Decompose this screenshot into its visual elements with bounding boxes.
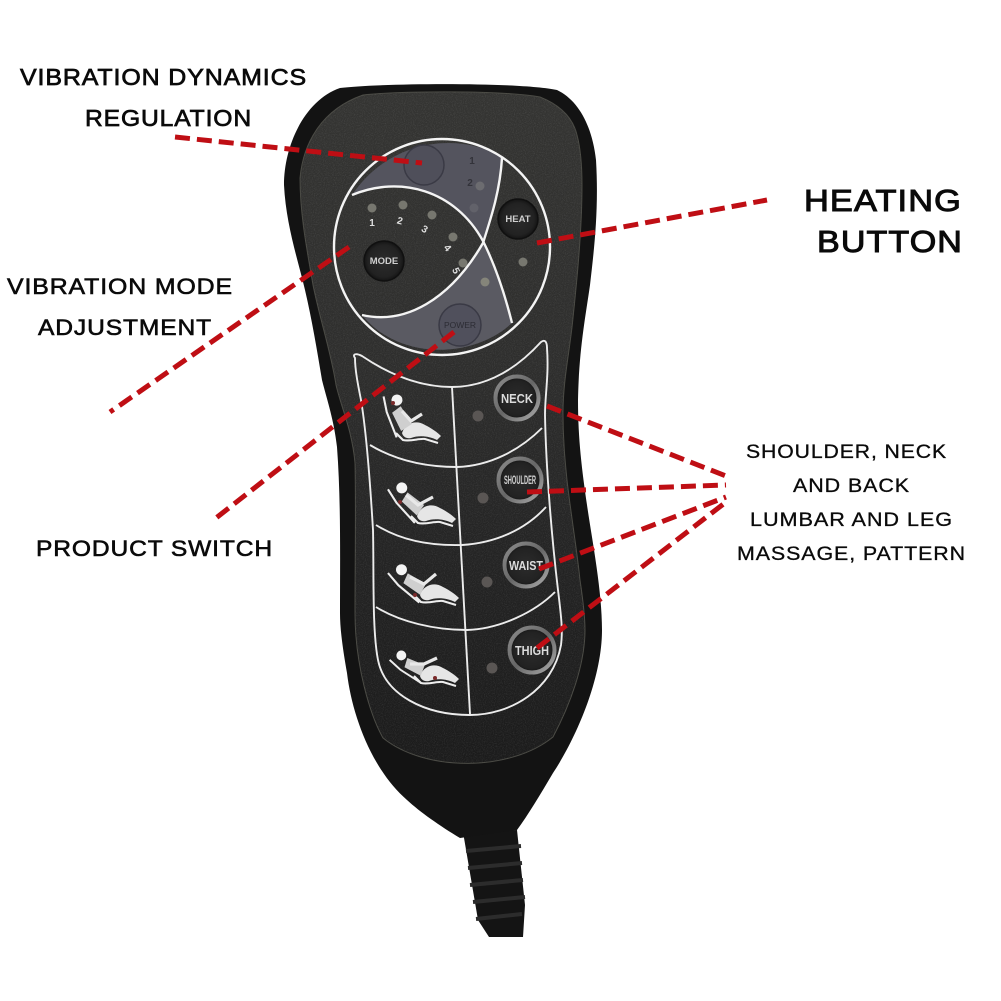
face grain bbox=[300, 92, 585, 763]
button: mode: MODE bbox=[370, 256, 398, 267]
button: neck: NECK bbox=[501, 391, 534, 406]
level numbers: 5 bbox=[449, 266, 462, 276]
level numbers: 1 bbox=[469, 156, 475, 167]
panel: upper control dial bbox=[334, 139, 550, 355]
textured face bbox=[300, 92, 585, 763]
icon: thigh figure bbox=[389, 646, 459, 686]
button: shoulder: SHOULDER bbox=[504, 473, 536, 487]
button: shoulder bbox=[498, 458, 542, 502]
icon: neck figure bbox=[383, 391, 441, 443]
button: waist bbox=[504, 544, 548, 586]
label: vibration mode adjustment: ADJUSTMENT bbox=[38, 315, 212, 340]
button: thigh: THIGH bbox=[515, 643, 549, 658]
level numbers: 2 bbox=[396, 216, 404, 228]
label: vibration dynamics regulation: REGULATION bbox=[85, 105, 252, 131]
label: vibration mode adjustment bbox=[7, 274, 233, 340]
button: waist: WAIST bbox=[509, 558, 543, 573]
button: vibration dynamics bbox=[404, 145, 444, 185]
label: shoulder, neck and back lumbar and leg massage, pattern: LUMBAR AND LEG bbox=[750, 510, 953, 531]
shaded sector bottom bbox=[362, 243, 512, 350]
remote control device bbox=[284, 84, 602, 937]
icon: shoulder figure bbox=[387, 478, 456, 526]
cable bbox=[463, 830, 525, 937]
level numbers: 2 bbox=[467, 178, 473, 189]
button: neck bbox=[496, 376, 538, 420]
button: heat bbox=[498, 199, 538, 239]
remote body bbox=[284, 84, 602, 838]
label: vibration dynamics regulation bbox=[20, 64, 307, 131]
callout arrows: red dashed leaders bbox=[110, 137, 767, 648]
button: power: POWER bbox=[444, 320, 476, 330]
label: product switch: PRODUCT SWITCH bbox=[36, 536, 273, 561]
button: power bbox=[439, 304, 481, 346]
level numbers: 3 bbox=[419, 224, 430, 236]
shaded sector top bbox=[352, 143, 502, 241]
label: heating button: HEATING bbox=[804, 183, 962, 218]
grid lines bbox=[354, 341, 562, 715]
button: thigh bbox=[510, 628, 554, 672]
dial lines bbox=[334, 139, 550, 355]
label: shoulder, neck and back lumbar and leg massage, pattern: SHOULDER, NECK bbox=[746, 442, 947, 463]
zone indicator lights bbox=[472, 410, 498, 674]
icon: waist figure bbox=[387, 559, 459, 605]
label: heating button bbox=[804, 183, 963, 259]
button: heat: HEAT bbox=[505, 214, 531, 225]
label: vibration dynamics regulation: VIBRATION DYNAMICS bbox=[20, 64, 307, 90]
level numbers: 1 bbox=[369, 218, 375, 229]
indicator lights bbox=[368, 182, 528, 286]
label: shoulder, neck and back lumbar and leg massage, pattern: AND BACK bbox=[793, 476, 910, 497]
panel: massage zone grid bbox=[354, 341, 562, 715]
label: shoulder, neck and back lumbar and leg massage, pattern: MASSAGE, PATTERN bbox=[737, 544, 966, 565]
button: mode bbox=[364, 241, 404, 281]
level numbers bbox=[369, 156, 475, 276]
label: heating button: BUTTON bbox=[817, 224, 963, 259]
label: shoulder, neck and back lumbar and leg massage, pattern bbox=[737, 442, 966, 565]
level numbers: 4 bbox=[441, 243, 453, 254]
label: vibration mode adjustment: VIBRATION MODE bbox=[7, 274, 233, 299]
